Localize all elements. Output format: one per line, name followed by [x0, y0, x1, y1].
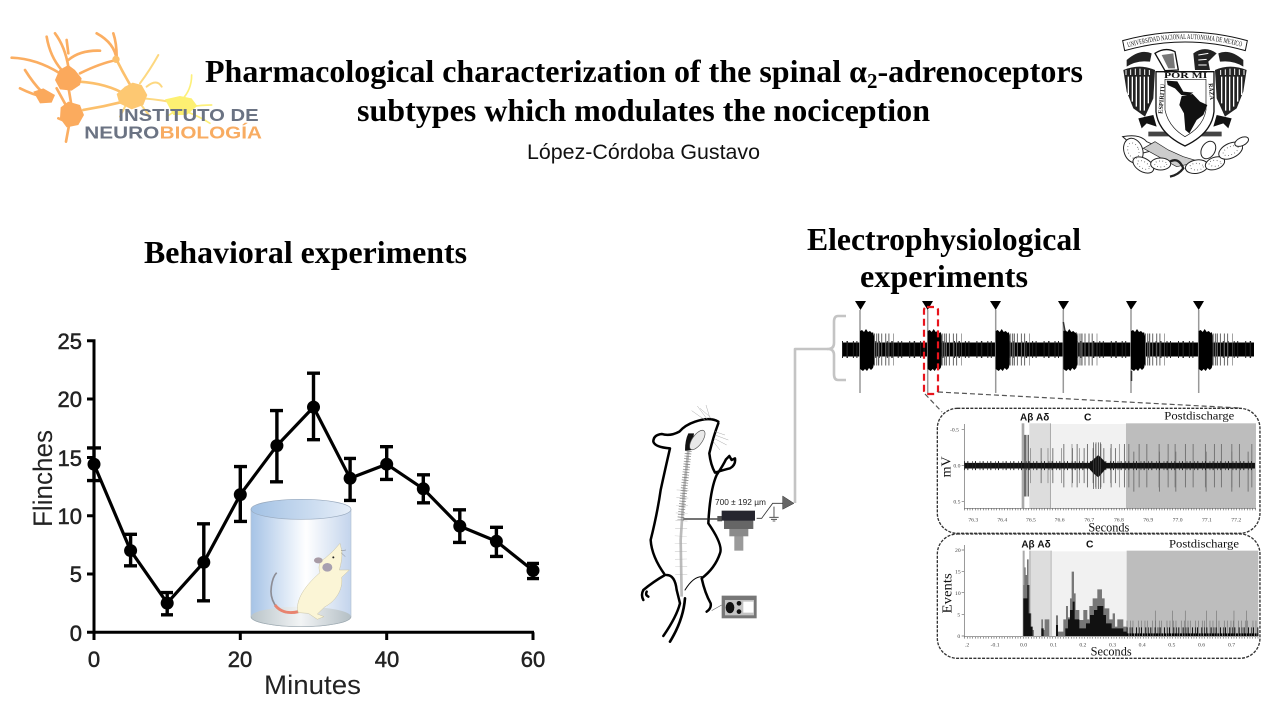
panel: event histogram [937, 534, 1260, 658]
voltage tick labels: 77.1 [1202, 517, 1212, 523]
voltage tick labels: 77.2 [1231, 517, 1241, 523]
voltage tick labels: 76.8 [1114, 517, 1124, 523]
voltage signal [964, 455, 1255, 477]
logo: UNAM crest [1122, 32, 1249, 178]
voltage tick labels: 77.0 [1173, 517, 1183, 523]
crest cacti [1120, 135, 1250, 177]
heading: Behavioral experiments: Behavioral experiments [144, 234, 467, 270]
depth label: 700 ± 192 µm [715, 497, 766, 507]
panel: voltage recording [937, 408, 1260, 534]
icon: anesthetized rat with spinal recording setup [642, 405, 794, 642]
evoked bursts [860, 310, 1233, 393]
histogram labels [940, 536, 1239, 658]
title: -adrenoceptors [877, 53, 1083, 89]
crest banner: UNIVERSIDAD NACIONAL AUTONOMA DE MEXICO [1126, 34, 1242, 47]
x axis numbers [88, 647, 545, 672]
stimulator box [712, 596, 757, 618]
chart axes [87, 339, 534, 640]
title: Pharmacological characterization of the spinal α [205, 53, 867, 89]
voltage tick labels: 76.7 [1084, 517, 1094, 523]
fiber response windows [1022, 423, 1256, 508]
crest shield with map of Latin America [1156, 71, 1215, 146]
y axis numbers: 5 [70, 562, 82, 587]
y axis numbers: 0 [70, 621, 82, 646]
brain and spinal cord [681, 428, 708, 597]
voltage axis [962, 424, 1256, 508]
panel border [937, 408, 1260, 533]
histogram tick labels: 5 [957, 613, 960, 619]
title: 2 [867, 69, 877, 93]
histogram tick labels: 10 [955, 591, 961, 597]
x axis label: Minutes [264, 670, 361, 700]
voltage tick labels: 76.5 [1026, 517, 1036, 523]
x axis numbers: 0 [88, 647, 100, 672]
histogram labels: Aβ Aδ [1021, 539, 1051, 550]
histogram tick labels: 15 [955, 569, 961, 575]
crest eagles [1123, 49, 1247, 136]
voltage labels: mV [940, 456, 955, 477]
histogram labels: Postdischarge [1169, 536, 1239, 550]
histogram labels: Events [940, 573, 955, 613]
crest shield with map of Latin America: RAZA [1207, 83, 1215, 100]
histogram axes [962, 545, 1258, 637]
fiber response windows [1023, 551, 1258, 636]
author: López-Córdoba Gustavo [527, 141, 760, 164]
voltage tick labels: -0.5 [950, 427, 959, 433]
voltage labels: Aβ Aδ [1020, 412, 1049, 423]
histogram tick labels: 0.0 [1020, 643, 1027, 649]
histogram tick labels: 0.3 [1109, 643, 1116, 649]
title: subtypes which modulates the nociception [357, 92, 930, 128]
logo text: INSTITUTO DE [118, 105, 259, 125]
voltage tick labels: 76.9 [1143, 517, 1153, 523]
crest shield with map of Latin America: ESPIRITU [1157, 83, 1167, 114]
logo text: NEURO [84, 122, 159, 142]
x axis numbers: 60 [521, 647, 545, 672]
y axis numbers: 15 [58, 446, 82, 471]
error bars [87, 373, 539, 615]
voltage tick labels: 0.5 [953, 500, 961, 506]
baseline activity band [842, 342, 1254, 356]
zoom connector lines [925, 392, 1240, 412]
icon: orange neurons [12, 33, 212, 142]
x axis numbers: 40 [375, 647, 399, 672]
amplifier [757, 496, 794, 521]
voltage labels: Postdischarge [1164, 408, 1234, 422]
histogram tick labels: 20 [955, 548, 961, 554]
heading: Electrophysiological experiments: Electrophysiological [807, 221, 1081, 257]
voltage labels [940, 408, 1234, 534]
voltage labels: C [1084, 412, 1092, 423]
y axis numbers: 20 [58, 387, 82, 412]
crest shield with map of Latin America: POR MI [1164, 71, 1207, 80]
y axis numbers: 25 [58, 329, 82, 354]
electrode [683, 511, 755, 551]
voltage labels: Seconds [1088, 520, 1130, 534]
icon: rat in glass cylinder [251, 499, 351, 627]
data points [88, 401, 540, 610]
histogram labels: C [1086, 539, 1094, 550]
voltage tick labels: 76.3 [968, 517, 978, 523]
voltage tick labels: 76.6 [1055, 517, 1065, 523]
title [205, 53, 1083, 128]
histogram labels: Seconds [1091, 644, 1132, 658]
selection: red dashed box [924, 307, 938, 394]
histogram tick labels: 0.7 [1228, 643, 1235, 649]
connector: bracket from amplifier to trace [795, 316, 846, 503]
histogram tick labels: 0.6 [1198, 643, 1205, 649]
y axis label: Flinches [28, 430, 58, 527]
voltage tick labels: 0.0 [953, 464, 961, 470]
histogram tick labels: 0.5 [1168, 643, 1176, 649]
rat outline [642, 419, 735, 642]
histogram tick labels: 0.1 [1050, 643, 1057, 649]
heading: Electrophysiological experiments [807, 221, 1081, 294]
electrophysiology trace with six stimuli [842, 301, 1254, 393]
stimulus markers [855, 301, 1204, 310]
panel border [937, 534, 1260, 658]
logo text [84, 105, 262, 142]
logo: Instituto de Neurobiología [12, 33, 262, 142]
histogram tick labels: -0.1 [991, 643, 1000, 649]
heading: Electrophysiological experiments: experiments [860, 258, 1028, 294]
histogram tick labels: .2 [965, 643, 969, 649]
data line [94, 407, 533, 603]
histogram tick labels [955, 548, 1235, 649]
y axis numbers [58, 329, 82, 646]
histogram tick labels: 0.2 [1079, 643, 1087, 649]
histogram tick labels: 0 [957, 634, 960, 640]
y axis numbers: 10 [58, 504, 82, 529]
voltage tick labels [950, 427, 1241, 523]
histogram bars [1023, 559, 1258, 636]
whiskers [692, 405, 728, 450]
logo text: BIOLOGÍA [160, 121, 262, 142]
voltage tick labels: 76.4 [997, 517, 1007, 523]
x axis numbers: 20 [228, 647, 252, 672]
line chart: flinches over minutes [28, 329, 545, 700]
histogram tick labels: 0.4 [1139, 643, 1146, 649]
